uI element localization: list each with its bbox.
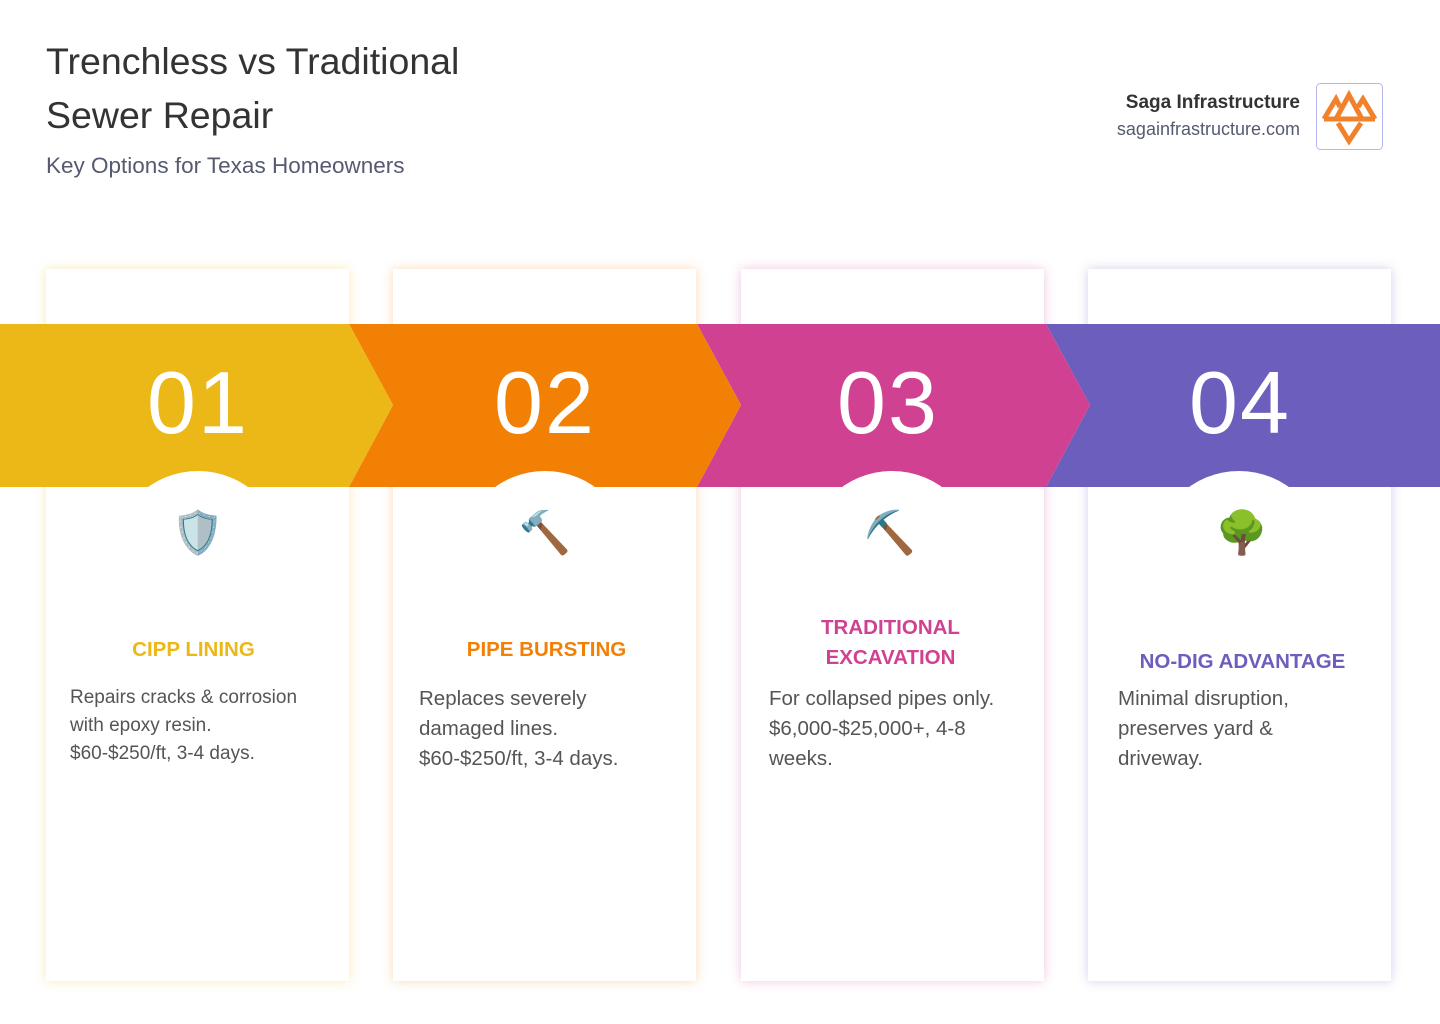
text 4: preserves yard &: [1118, 717, 1273, 740]
number 03: 03: [837, 353, 939, 452]
text 3: [769, 687, 994, 770]
text 2: [419, 687, 618, 770]
subtitle: Key Options for Texas Homeowners: [46, 153, 404, 178]
card 3: [741, 269, 1044, 981]
brand name: Saga Infrastructure: [1126, 92, 1300, 113]
card 1: [46, 269, 349, 981]
brand url: sagainfrastructure.com: [1117, 119, 1300, 139]
number 01: 01: [147, 353, 249, 452]
card 4: [1088, 269, 1391, 981]
heading 3: EXCAVATION: [826, 646, 955, 669]
text 3: weeks.: [769, 747, 833, 770]
text 2: damaged lines.: [419, 717, 558, 740]
heading 4: NO-DIG ADVANTAGE: [1140, 650, 1345, 673]
title: Sewer Repair: [46, 94, 273, 136]
circles: [112, 471, 284, 643]
text 2: $60-$250/ft, 3-4 days.: [419, 747, 618, 770]
title: Trenchless vs Traditional: [46, 40, 459, 82]
heading 3: TRADITIONAL: [821, 616, 960, 639]
logo: [1316, 83, 1383, 150]
text 4: driveway.: [1118, 747, 1203, 770]
text 1: with epoxy resin.: [70, 715, 212, 736]
number 04: 04: [1189, 353, 1291, 452]
text 4: Minimal disruption,: [1118, 687, 1289, 710]
brand block: [1117, 83, 1383, 150]
card 2: [393, 269, 696, 981]
chevron band: [0, 324, 1440, 487]
text 1: Repairs cracks & corrosion: [70, 687, 297, 708]
title: [46, 40, 459, 136]
icon: tree: 🌳: [1216, 509, 1268, 556]
text 1: $60-$250/ft, 3-4 days.: [70, 743, 255, 764]
icon: hammer: 🔨: [519, 509, 571, 556]
icon: shield: 🛡️: [172, 509, 224, 556]
heading 3: [821, 616, 960, 669]
text 2: Replaces severely: [419, 687, 586, 710]
text 4: [1118, 687, 1289, 770]
text 1: [70, 687, 297, 764]
text 3: For collapsed pipes only.: [769, 687, 994, 710]
number 02: 02: [494, 353, 596, 452]
heading 2: PIPE BURSTING: [467, 638, 626, 661]
heading 1: CIPP LINING: [132, 638, 255, 661]
icon: pick: ⛏️: [864, 509, 916, 556]
text 3: $6,000-$25,000+, 4-8: [769, 717, 966, 740]
